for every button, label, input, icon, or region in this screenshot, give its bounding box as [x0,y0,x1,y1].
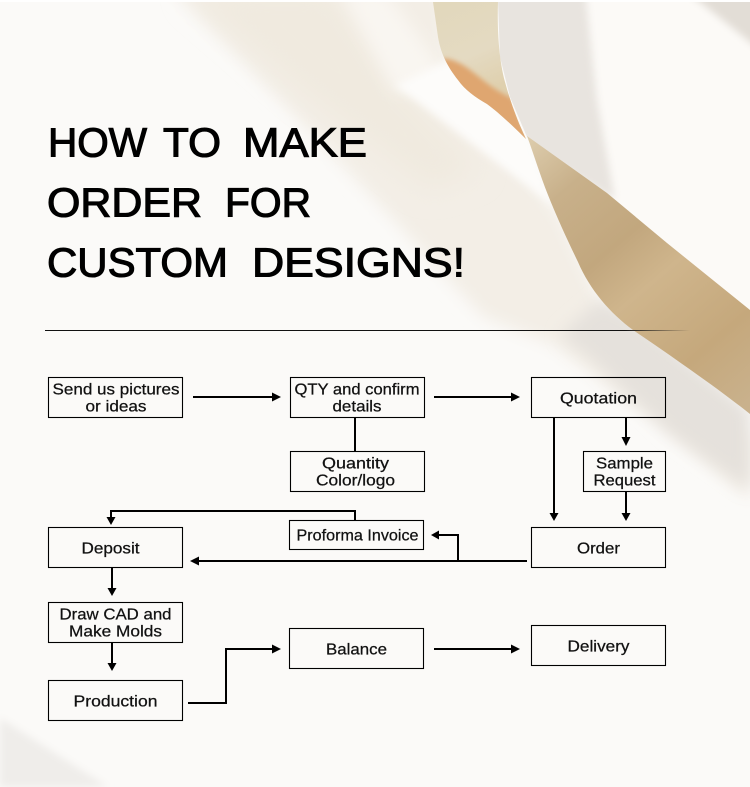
box: production [48,680,182,720]
arrow: balance to delivery [434,644,520,654]
title divider line [45,330,690,331]
box: production: Production [74,694,158,710]
box: balance [290,628,424,668]
box: send us pictures [48,378,182,418]
box: proforma invoice [290,520,424,550]
box: QTY and confirm details [290,378,424,418]
connector: QTY to quantity [354,418,356,451]
title: FOR [225,180,311,226]
box: QTY and confirm details: details [332,398,382,416]
arrow: deposit to draw CAD [108,568,116,596]
arrow: draw CAD to production [108,643,116,671]
title: CUSTOM [47,240,228,286]
box: sample request [584,452,666,492]
box: balance: Balance [326,642,387,658]
box: send us pictures: or ideas [86,398,146,416]
arrow: quotation to order [550,418,558,521]
arrow: proforma invoice to deposit [106,511,355,525]
title: MAKE [243,120,367,166]
title: TO [163,120,221,166]
box: sample request: Sample [596,456,653,472]
box: deposit: Deposit [82,540,140,558]
title: DESIGNS! [252,240,465,286]
title [47,120,465,286]
box: draw CAD and make molds [48,602,182,642]
box: draw CAD and make molds: Draw CAD and [60,606,172,624]
title: HOW [48,120,147,166]
arrow: order to deposit [190,556,527,566]
box: quantity color/logo: Color/logo [316,472,395,490]
box: send us pictures: Send us pictures [52,382,180,398]
ribbon upper fold [433,2,530,145]
box: quotation [532,378,666,418]
box: quantity color/logo [290,452,424,492]
box: order [532,528,666,568]
title: ORDER [47,180,202,226]
box: sample request: Request [594,472,656,490]
arrow: quotation to sample request [622,418,630,446]
arrow: production to balance [188,644,281,703]
box: QTY and confirm details: QTY and confirm [294,382,420,398]
arrow: QTY to quotation [434,392,520,402]
gold satin ribbon [433,2,750,414]
arrow: sample request to order [622,492,630,521]
arrow: pictures to QTY [193,392,281,402]
box: delivery: Delivery [568,638,630,656]
box: order: Order [577,540,621,558]
arrow: order line to proforma invoice [431,530,458,561]
ribbon lower band [527,136,750,414]
box: delivery [532,626,666,666]
box: draw CAD and make molds: Make Molds [69,624,162,640]
box: proforma invoice: Proforma Invoice [296,528,419,544]
box: deposit [48,528,182,568]
box: quantity color/logo: Quantity [322,456,389,472]
box: quotation: Quotation [560,390,637,408]
flowchart [48,378,666,720]
